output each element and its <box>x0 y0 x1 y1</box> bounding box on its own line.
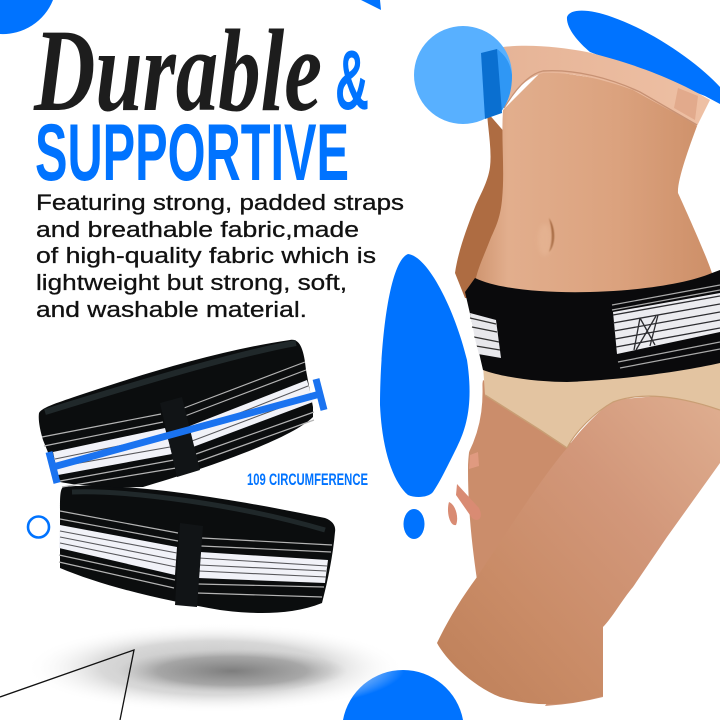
decoration: large blue petal <box>380 254 470 497</box>
decoration: bottom blue circle <box>343 670 463 720</box>
decoration: top-left blue circle <box>0 0 53 34</box>
description text: of high-quality fabric which is <box>36 243 376 268</box>
decoration: small blue oval <box>404 509 424 539</box>
decoration: top blue triangle <box>361 0 381 10</box>
description text: and washable material. <box>36 297 307 322</box>
white elastic right <box>198 552 328 583</box>
center strap <box>175 523 203 607</box>
stripes <box>55 386 311 467</box>
description text: lightweight but strong, soft, <box>36 270 347 295</box>
white elastic left <box>53 428 172 475</box>
back arm and side <box>455 112 520 300</box>
title: ampersand: & <box>335 33 369 127</box>
description text: Featuring strong, padded straps <box>36 190 404 215</box>
center strap <box>160 397 200 477</box>
product: upper belt <box>39 340 314 487</box>
torso <box>475 70 712 300</box>
rear leg <box>468 380 580 600</box>
product: lower belt <box>59 486 335 613</box>
white elastic left <box>59 525 177 575</box>
description text <box>36 190 404 322</box>
description text: and breathable fabric,made <box>36 217 359 242</box>
ground shadow <box>25 623 405 713</box>
measurement label: 109 CIRCUMFERENCE <box>247 471 368 489</box>
belt left elastic panel <box>470 313 501 358</box>
title: script word: Durable <box>33 5 322 136</box>
measurement bar <box>49 379 324 483</box>
bra <box>502 46 710 126</box>
decoration: light blue circle with dark band <box>414 26 512 124</box>
front thigh <box>437 395 720 704</box>
decoration: small blue ring <box>28 516 49 538</box>
hand fingers <box>456 484 481 520</box>
white elastic right <box>187 380 313 447</box>
briefs <box>483 360 720 448</box>
title: SUPPORTIVE: SUPPORTIVE <box>35 108 349 198</box>
photo: model wearing the belt <box>437 46 720 706</box>
navel <box>549 218 554 252</box>
worn belt <box>465 270 720 382</box>
stripes <box>60 531 327 577</box>
decoration: top-right blue petal <box>567 11 720 104</box>
belt right elastic panel <box>613 293 720 354</box>
decoration: black triangle outline <box>0 650 134 720</box>
